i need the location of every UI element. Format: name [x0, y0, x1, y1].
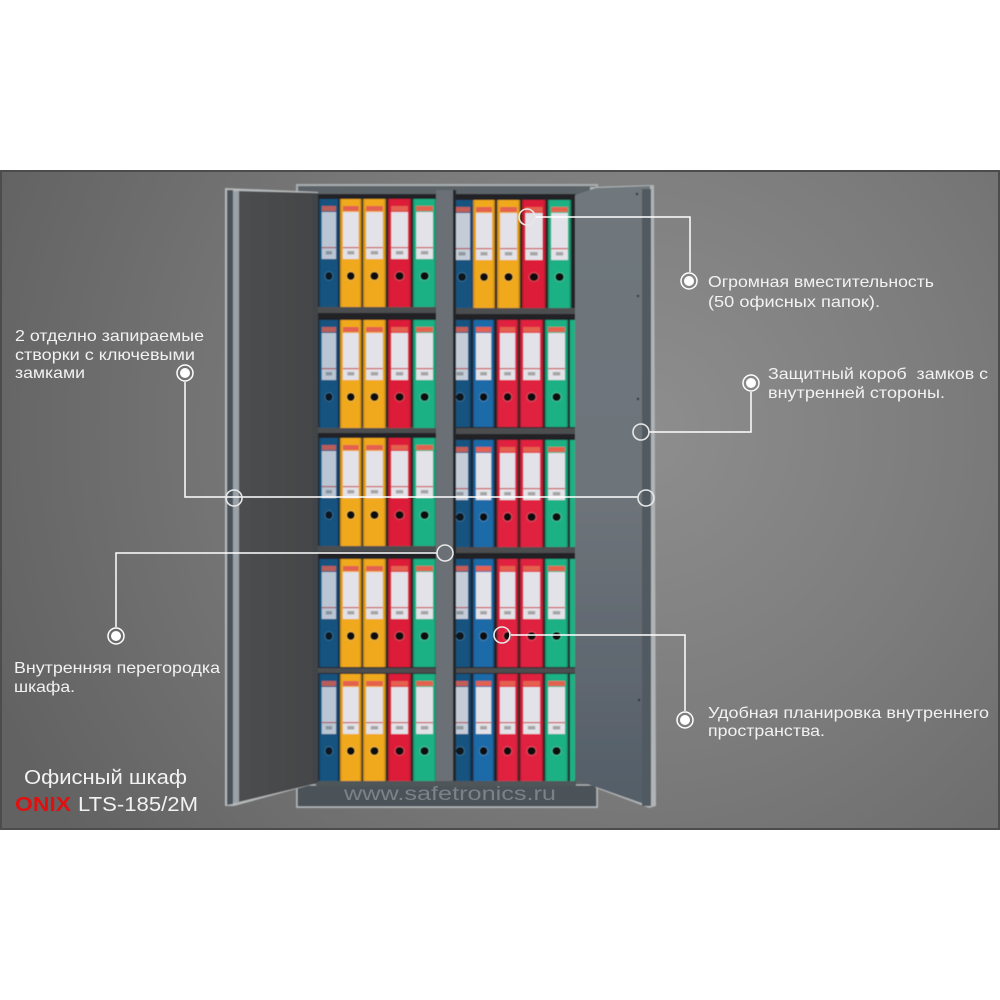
text: capacity: Огромная вместительность — [708, 274, 934, 291]
text: lock box — [768, 366, 988, 402]
marker: left lock — [226, 490, 242, 506]
text: lockable doors: створки с ключевыми — [15, 347, 195, 364]
callout: partition — [14, 545, 453, 696]
cabinet body — [296, 184, 598, 808]
callout: lock box — [633, 366, 988, 440]
title: product name: Офисный шкаф — [24, 767, 187, 789]
marker: partition — [437, 545, 453, 561]
title: product name — [15, 767, 198, 816]
marker: right lock — [638, 490, 654, 506]
right door — [575, 185, 656, 808]
text: layout — [708, 705, 989, 740]
callout: lockable doors — [15, 328, 654, 506]
marker dot: lock box — [743, 375, 759, 391]
marker dot: layout — [677, 712, 693, 728]
binders: right section — [449, 200, 575, 782]
marker: interior — [494, 627, 510, 643]
text: lock box: Защитный короб замков с — [768, 366, 988, 383]
callout: capacity — [519, 209, 934, 311]
panel: background — [1, 171, 999, 829]
text: lockable doors — [15, 328, 204, 382]
text: partition — [14, 660, 220, 696]
marker dot: capacity — [681, 273, 697, 289]
text: capacity: (50 офисных папок). — [708, 294, 880, 311]
cabinet — [225, 184, 656, 808]
binders: left section — [319, 199, 436, 782]
marker: binders — [519, 209, 535, 225]
text: lockable doors: замками — [15, 365, 85, 382]
watermark: www.safetronics.ru — [343, 784, 556, 805]
text: partition: шкафа. — [14, 679, 75, 696]
center pillar — [436, 190, 456, 786]
text: layout: пространства. — [708, 723, 825, 740]
callout: layout — [494, 627, 989, 740]
left door — [225, 188, 318, 806]
cabinet plinth — [297, 781, 597, 807]
title: product name: LTS-185/2M — [78, 794, 198, 816]
title: product name: ONIX — [15, 794, 72, 816]
marker dot: lockable doors — [177, 365, 193, 381]
marker dot: partition — [108, 628, 124, 644]
text: lock box: внутренней стороны. — [768, 385, 945, 402]
text: layout: Удобная планировка внутреннего — [708, 705, 989, 722]
marker: door — [633, 424, 649, 440]
text: capacity — [708, 274, 934, 311]
text: partition: Внутренняя перегородка — [14, 660, 220, 677]
text: lockable doors: 2 отделно запираемые — [15, 328, 204, 345]
shelves — [316, 307, 576, 673]
